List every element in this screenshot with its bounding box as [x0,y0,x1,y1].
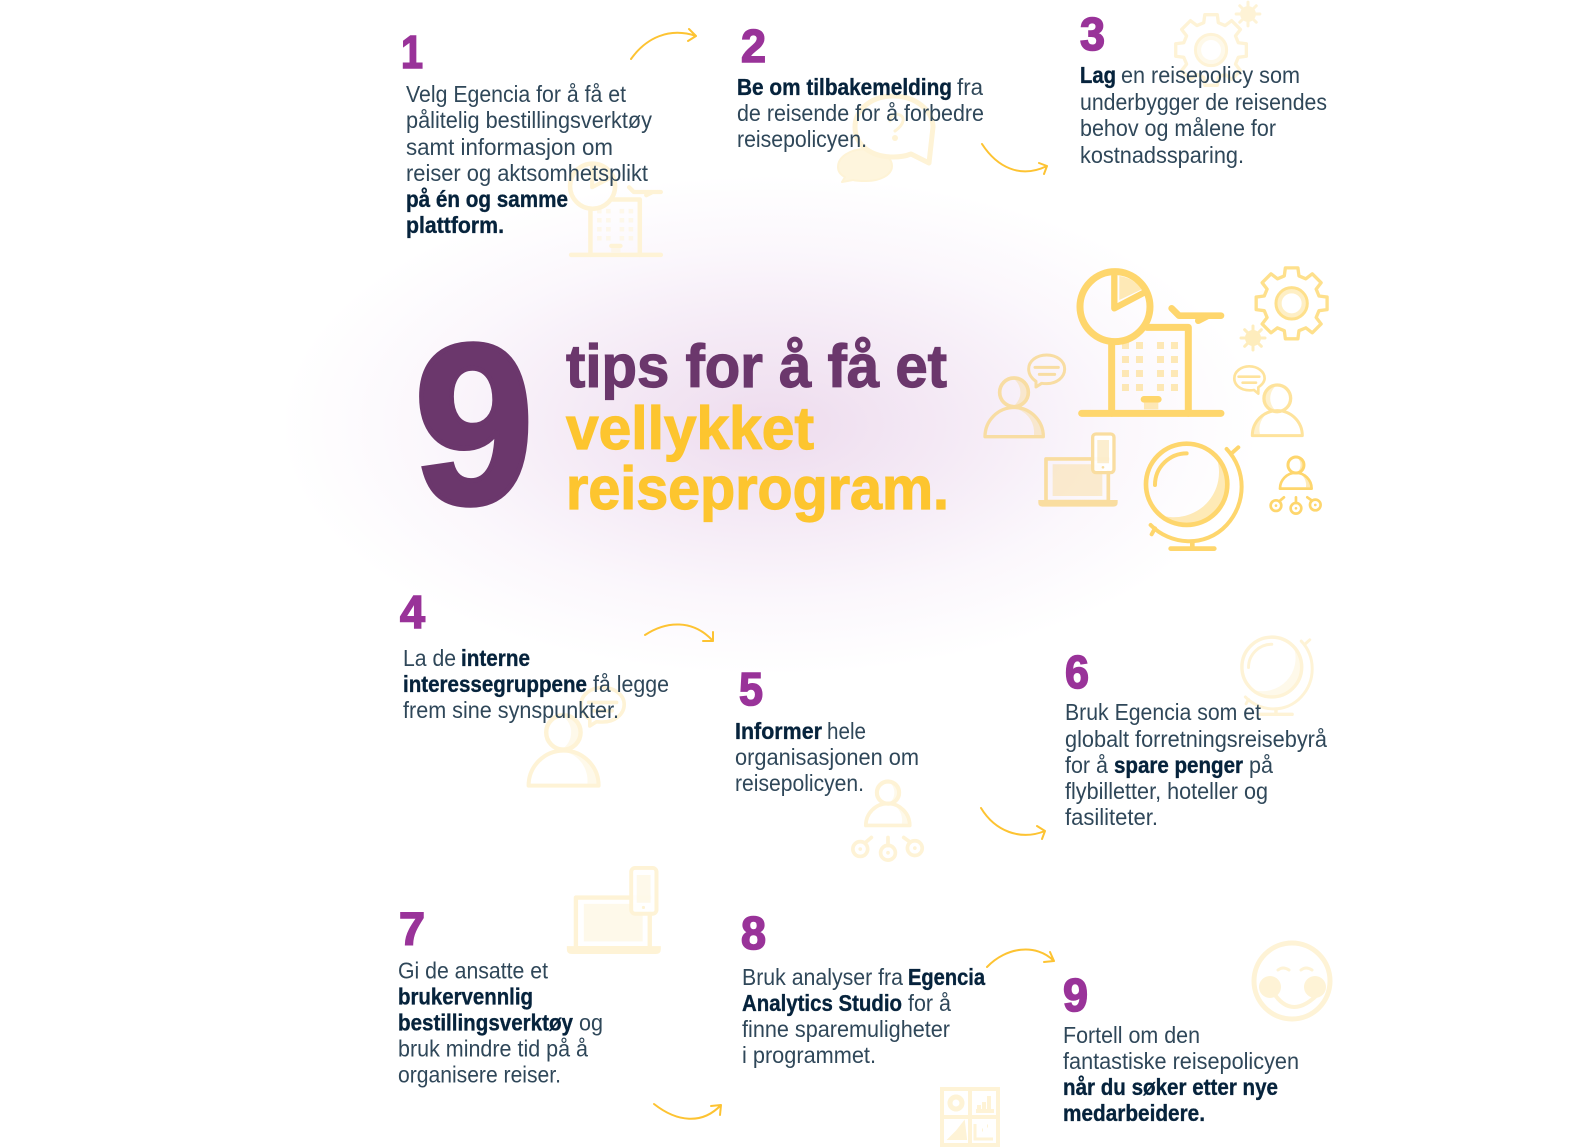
tip 9 text: Fortell om den [1063,1022,1200,1048]
tip 1 text: plattform. [406,212,504,238]
tip 6 text: for å [1065,752,1108,778]
tip 8 text: for å [908,990,951,1016]
tip 4 text: interne [461,645,530,671]
icon: sun spark [1241,326,1265,350]
faded icon: analytics dashboard behind tip 8 [942,1089,998,1145]
number 1: 1 [401,26,423,78]
panel: tip 4 [400,586,669,723]
panel: tip 2 [737,20,984,152]
tip 1 text: Velg Egencia for å få et [406,81,627,107]
icon cluster: travel program illustrations [985,268,1327,549]
tip 1 text [406,81,652,238]
tip 8 text: i programmet. [742,1042,876,1068]
tip 3 text: behov og målene for [1080,115,1276,141]
arrow: tip 5 to tip 6 [981,808,1045,839]
number 6: 6 [1065,646,1089,698]
arrow: tip 1 to tip 2 [631,29,696,59]
title: tips for å få et vellykket reiseprogram: reiseprogram. [566,455,949,522]
tip 6 text: globalt forretningsreisebyrå [1065,726,1327,752]
tip 2 text: reisepolicyen. [737,126,867,152]
tip 5 text: organisasjonen om [735,744,919,770]
tip 7 text: Gi de ansatte et [398,958,549,984]
tip 6 text: spare penger [1114,752,1243,778]
tip 5 text: Informer [735,718,822,744]
icon: globe [1146,444,1242,549]
number 3: 3 [1080,8,1105,60]
arrow: tip 2 to tip 3 [982,144,1047,174]
panel: tip 6 [1065,646,1327,830]
tip 7 text: bestillingsverktøy [398,1010,573,1036]
title: big number 9: 9 [414,298,534,552]
tip 4 text: frem sine synspunkter. [403,697,619,723]
tip 3 text [1080,62,1327,168]
arrow: tip 8 to tip 9 [987,950,1054,967]
panel: tip 3 [1080,8,1327,168]
faded icon: team behind tip 5 [853,782,922,860]
icon: manager and team [1271,457,1321,514]
tip 4 text: få legge [593,671,669,697]
tip 4 text: interessegruppene [403,671,587,697]
tip 2 text: Be om tilbakemelding [737,74,952,100]
tip 8 text: finne sparemuligheter [742,1016,950,1042]
tip 7 text: brukervennlig [398,984,533,1010]
tip 4 text [403,645,669,723]
tip 6 text [1065,699,1327,830]
faded icon: smiley beside tip 9 [1254,943,1330,1019]
tip 1 text: på én og samme [406,186,568,212]
tip 6 text: fasiliteter. [1065,804,1158,830]
faded icon: laptop behind tip 7 [567,868,661,954]
title: tips for å få et vellykket reiseprogram: tips for å få et [566,333,947,400]
tip 7 text [398,958,603,1088]
number 8: 8 [741,907,766,959]
tip 8 text: Egencia [908,964,985,990]
faded icon: person behind tip 4 [529,688,624,786]
tip 9 text [1063,1022,1299,1126]
tip 7 text: og [579,1010,603,1036]
icon: person with speech bubble, right [1234,366,1302,436]
title: tips for å få et vellykket reiseprogram [566,333,949,522]
tip 5 text: hele [827,718,866,744]
tip 3 text: underbygger de reisendes [1080,89,1327,115]
tip 6 text: på [1249,752,1273,778]
tip 2 text [737,74,984,152]
tip 7 text: bruk mindre tid på å [398,1036,588,1062]
tip 9 text: medarbeidere. [1063,1100,1205,1126]
tip 2 text: de reisende for å forbedre [737,100,984,126]
tip 5 text: reisepolicyen. [735,770,864,796]
panel: tip 8 [741,907,985,1068]
background glow [280,175,1260,675]
panel: tip 7 [398,902,603,1088]
tip 6 text: flybilletter, hoteller og [1065,778,1268,804]
faded icon: globe behind tip 6 [1242,637,1312,714]
faded icon: building behind tip 1 [570,164,661,255]
panel: tip 9 [1063,969,1299,1126]
tip 7 text: organisere reiser. [398,1062,561,1088]
icon: gear [1256,268,1327,339]
tip 1 text: pålitelig bestillingsverktøy [406,107,652,133]
tip 1 text: reiser og aktsomhetsplikt [406,160,649,186]
tip 3 text: en reisepolicy som [1121,62,1300,88]
arrow: tip 4 to tip 5 [645,624,713,641]
number 4: 4 [400,586,425,638]
number 2: 2 [741,20,766,72]
tip 3 text: Lag [1080,62,1116,88]
number 9: 9 [1063,969,1088,1021]
tip 6 text: Bruk Egencia som et [1065,699,1262,725]
tip 8 text: Analytics Studio [742,990,902,1016]
icon: clock, plane and building [1080,272,1221,413]
panel: tip 1 [401,26,652,238]
number 7: 7 [399,902,425,954]
tip 5 text [735,718,919,796]
faded icon: sun behind tip 3 [1236,2,1260,26]
icon: person with speech bubble, left [985,355,1065,437]
tip 8 text: Bruk analyser fra [742,964,903,990]
tip 1 text: samt informasjon om [406,134,613,160]
faded icon: gear behind tip 3 [1176,15,1246,85]
tip 2 text: fra [957,74,983,100]
arrow: tip 7 to tip 8 [654,1104,721,1119]
icon: laptop and phone [1038,434,1118,507]
tip 9 text: fantastiske reisepolicyen [1063,1048,1299,1074]
tip 4 text: La de [403,645,456,671]
panel: tip 5 [735,663,919,796]
tip 8 text [742,964,985,1068]
faded icon: speech bubbles behind tip 2 [838,96,933,182]
number 5: 5 [739,663,763,715]
tip 9 text: når du søker etter nye [1063,1074,1278,1100]
tip 3 text: kostnadssparing. [1080,142,1244,168]
title: tips for å få et vellykket reiseprogram: vellykket [566,395,814,462]
